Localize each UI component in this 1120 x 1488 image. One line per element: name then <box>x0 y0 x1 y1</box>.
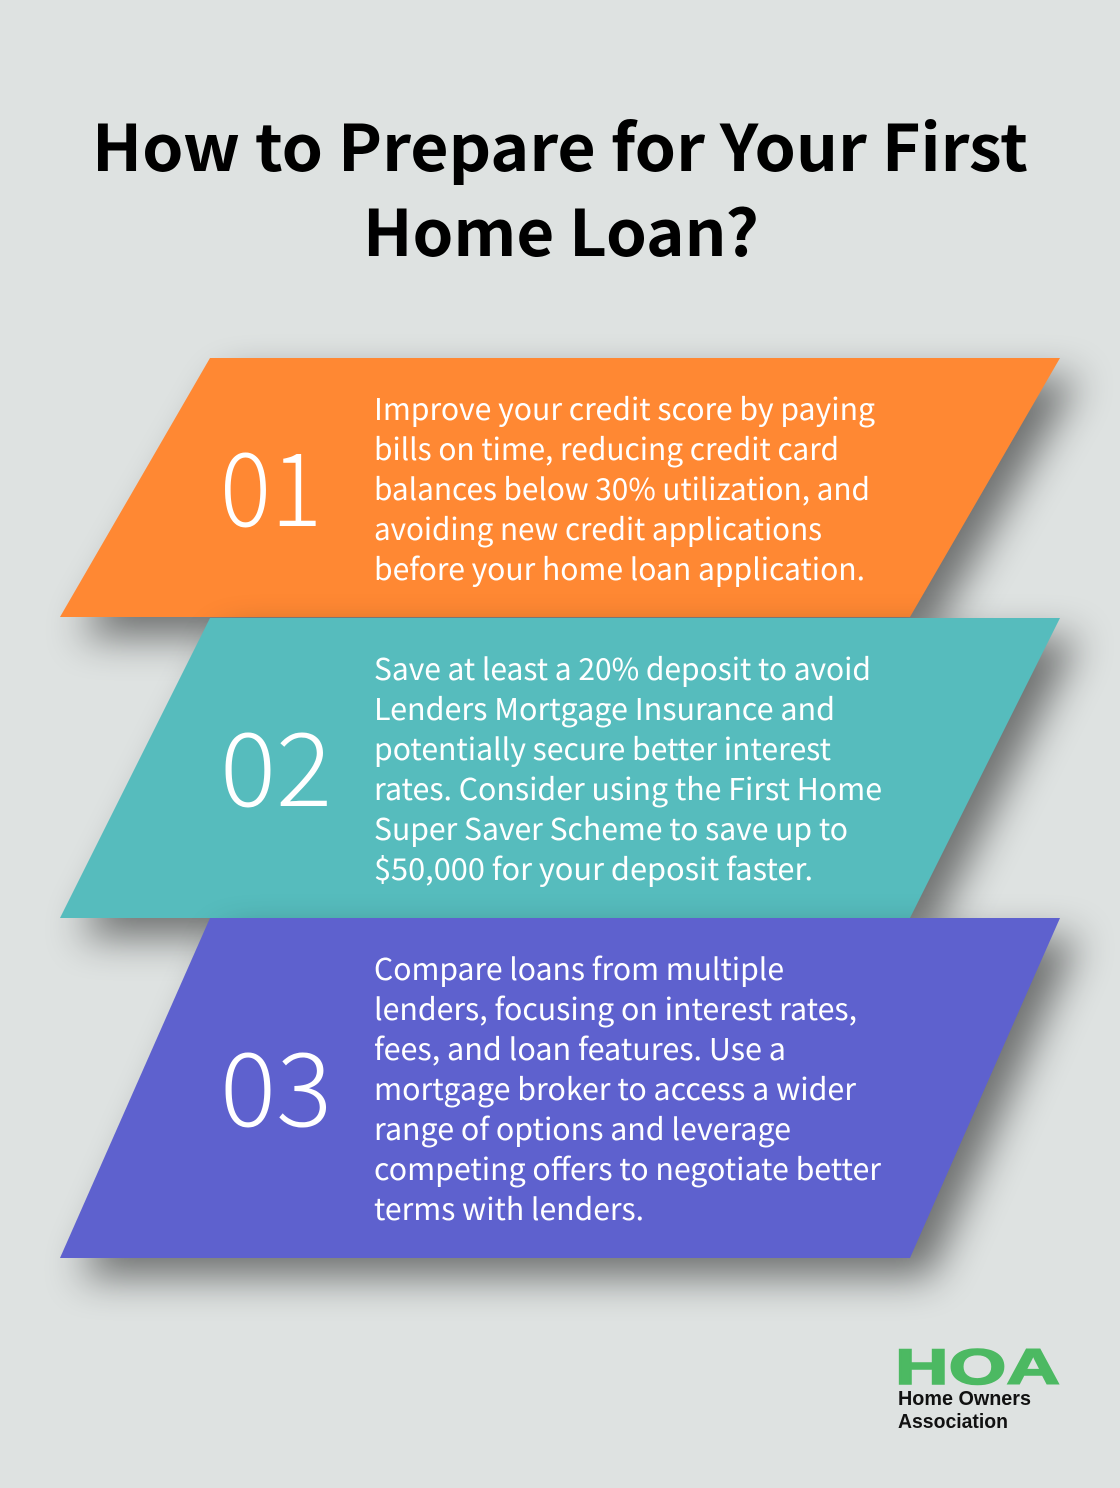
logo: HOA Home Owners Association <box>895 1339 1060 1433</box>
logo: HOA Home Owners Association: HOA <box>895 1339 1060 1395</box>
title <box>92 98 1028 275</box>
number 03: 03 <box>220 1009 332 1156</box>
logo: HOA Home Owners Association: Home Owners <box>898 1388 1031 1410</box>
text: step 01: Improve your credit score by paying <box>374 385 875 429</box>
text: step 01 <box>374 385 875 589</box>
text: step 03: terms with lenders. <box>374 1185 644 1229</box>
text: step 01: before your home loan application. <box>374 545 865 589</box>
title: How to Prepare for Your First <box>92 98 1028 190</box>
number 02: 02 <box>220 689 332 836</box>
number 01: 01 <box>220 409 322 556</box>
text: step 01: avoiding new credit applications <box>374 505 822 549</box>
panel: step 02 <box>60 618 1079 937</box>
text: step 01: bills on time, reducing credit card <box>374 425 839 469</box>
text: step 02: $50,000 for your deposit faster. <box>374 845 813 889</box>
text: step 03 <box>374 945 881 1229</box>
title: Home Loan? <box>363 183 759 275</box>
panel: step 01 <box>60 358 1079 637</box>
text: step 03: lenders, focusing on interest rates, <box>374 985 857 1029</box>
text: step 03: competing offers to negotiate better <box>374 1145 881 1189</box>
text: step 02: rates. Consider using the First Home <box>374 765 882 809</box>
panel: step 03 <box>60 918 1079 1277</box>
logo: HOA Home Owners Association: Association <box>898 1411 1008 1433</box>
text: step 02 <box>374 645 882 889</box>
text: step 01: balances below 30% utilization, and <box>374 465 870 509</box>
text: step 02: Lenders Mortgage Insurance and <box>374 685 835 729</box>
text: step 03: Compare loans from multiple <box>374 945 784 989</box>
text: step 03: mortgage broker to access a wider <box>374 1065 856 1109</box>
text: step 02: potentially secure better interest <box>374 725 831 769</box>
text: step 02: Super Saver Scheme to save up to <box>374 805 848 849</box>
text: step 02: Save at least a 20% deposit to avoid <box>374 645 871 689</box>
text: step 03: fees, and loan features. Use a <box>374 1025 786 1069</box>
text: step 03: range of options and leverage <box>374 1105 791 1149</box>
